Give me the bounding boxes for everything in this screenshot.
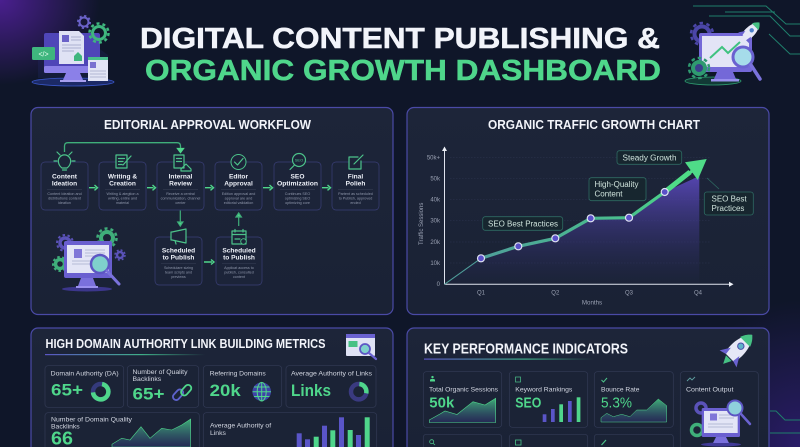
workflow step: internal review: Review (169, 181, 193, 188)
metric card: domain quality backlinks: Backlinks (51, 424, 80, 430)
callout: high-quality content: Content (594, 190, 623, 198)
workflow step: writing and creation: Writing & (108, 174, 137, 181)
kpi card: lower row right (594, 434, 673, 447)
workflow step: seo optimization: optimizing core (285, 201, 310, 205)
metric card: average authority of links: Links (291, 381, 331, 400)
line chart (419, 146, 734, 306)
metric card: average authority bars: Average Authority of (210, 422, 271, 429)
kpi card: keyword rankings (509, 372, 588, 427)
arrow: review down to scheduled (178, 210, 183, 226)
area sparkline (112, 419, 191, 447)
panel: key performance indicators (407, 326, 769, 447)
workflow step: scheduled to publish second: publish, consulted (224, 270, 254, 274)
workflow step: editor approval: Edition approval and (222, 192, 255, 196)
callout: steady growth: Steady Growth (622, 153, 676, 162)
area sparkline (429, 398, 496, 422)
kpi card: total organic sessions (423, 372, 502, 427)
kpi card: total organic sessions: 50k (429, 395, 455, 412)
heading: link building metrics: HIGH DOMAIN AUTHORITY LINK BUILDING METRICS (46, 336, 326, 351)
workflow step: internal review: Internal (169, 174, 193, 181)
workflow step: scheduled to publish second (216, 230, 262, 285)
panel: high domain authority link building metrics (31, 328, 393, 447)
workflow step: final polish: Polieh (346, 181, 365, 188)
panel: editorial approval workflow (31, 108, 393, 314)
workflow step: editor approval: Approval (224, 181, 253, 188)
workflow step: scheduled to publish second: Applicat access to (224, 266, 254, 270)
workflow step: seo optimization (274, 154, 321, 210)
workflow step: final polish: Final (348, 174, 363, 181)
icon: publishing computer illustration: </> (38, 52, 49, 58)
line chart: 30k (430, 219, 441, 225)
workflow step: internal review (157, 155, 204, 210)
metric card: domain authority: Domain Authority (DA) (51, 371, 119, 378)
metric card: quality backlinks: Backlinks (132, 376, 162, 383)
metric card: average authority of links (286, 366, 376, 407)
workflow step: scheduled to publish (155, 229, 202, 285)
line chart: 0 (437, 282, 441, 288)
kpi card: content output: Content Output (686, 386, 734, 393)
workflow step: scheduled to publish: Scheduled (162, 248, 195, 255)
icon: growth monitor and rocket illustration (685, 17, 765, 85)
kpi card: bounce rate (594, 372, 673, 427)
kpi card: lower row middle (509, 434, 588, 447)
area sparkline (601, 399, 667, 422)
workflow step: editor approval: approval are and (225, 196, 252, 200)
workflow step: editor approval: Editor (229, 174, 248, 181)
workflow step: writing and creation (99, 155, 146, 210)
workflow step: editor approval (215, 154, 262, 210)
workflow step: scheduled to publish: to Publish (163, 255, 194, 262)
workflow step: content ideation: Content Ideation and (47, 192, 82, 196)
callout: seo best practices right (704, 178, 753, 215)
metric card: domain quality backlinks (45, 413, 199, 447)
metric card: quality backlinks (127, 366, 199, 407)
metric card: domain authority (45, 366, 124, 407)
icon: rocket (715, 326, 761, 372)
line chart: Q2 (551, 290, 560, 296)
metric card: average authority bars: Links (210, 430, 226, 437)
workflow step: writing and creation: Creation (109, 181, 136, 188)
heading: key performance indicators: KEY PERFORMANCE INDICATORS (424, 340, 628, 358)
connector: ideation to internal review (64, 143, 184, 152)
arrow (204, 260, 214, 264)
workflow step: final polish: to Publish, approved (339, 196, 372, 200)
callout: steady growth (617, 151, 682, 164)
callout: seo best practices: SEO Best Practices (488, 219, 558, 228)
arrow (147, 185, 156, 190)
metric card: referring domains: Referring Domains (210, 371, 266, 378)
workflow step: editor approval: editorial validation (224, 201, 253, 205)
workflow step: final polish (332, 155, 379, 210)
workflow step: scheduled to publish: team scripts and (165, 270, 192, 274)
kpi card: total organic sessions: Total Organic Sessions (429, 386, 499, 393)
kpi card: keyword rankings: SEO (515, 395, 542, 412)
line chart: 40k (430, 198, 441, 204)
workflow step: internal review: Receive a central (166, 192, 195, 196)
arrow: scheduled up to editor approval (236, 213, 241, 226)
workflow step: writing and creation: writing, entire and (108, 196, 137, 200)
arrow (89, 185, 98, 190)
metric card: referring domains: 20k (210, 381, 241, 400)
title: DIGITAL CONTENT PUBLISHING & (140, 23, 660, 55)
metric card: quality backlinks: 65+ (132, 385, 165, 404)
workflow step: final polish: Partent as scheduled (338, 192, 373, 196)
metric card: quality backlinks: Number of Quality (132, 369, 188, 376)
icon: browser with magnifier (346, 334, 376, 359)
kpi card: lower row left (423, 434, 502, 447)
workflow step: writing and creation: material (116, 201, 129, 205)
metric card: average authority bars (203, 413, 377, 447)
icon: monitor with magnifier (692, 400, 750, 446)
workflow step: scheduled to publish second: Scheduled (222, 248, 256, 255)
workflow step: content ideation: Ideation (52, 181, 77, 188)
workflow step: seo optimization: Optimization (277, 181, 318, 188)
line chart: 50k (430, 176, 441, 182)
metric card: average authority of links: Average Authority of Links (291, 371, 373, 378)
line chart: Months (582, 300, 602, 306)
bar chart (543, 397, 580, 422)
workflow step: seo optimization: SEO (291, 174, 304, 181)
callout: seo best practices right: SEO Best (712, 194, 747, 204)
callout: high-quality content (589, 178, 646, 201)
kpi card: content output (680, 372, 758, 447)
kpi card: keyword rankings: Keyword Rankings (515, 386, 573, 393)
line chart: Q1 (477, 290, 486, 296)
workflow step: seo optimization: SEO (295, 158, 303, 163)
workflow step: content ideation: ideation (58, 201, 71, 205)
metric card: domain quality backlinks: Number of Domain Quality (51, 416, 133, 424)
heading: organic traffic growth chart: ORGANIC TRAFFIC GROWTH CHART (488, 117, 700, 132)
line chart: Q3 (625, 290, 634, 296)
heading: editorial approval workflow: EDITORIAL APPROVAL WORKFLOW (104, 117, 312, 132)
workflow step: seo optimization: optimizing SEO (285, 196, 310, 200)
arrow (263, 185, 272, 190)
workflow step: final polish: ended (350, 201, 361, 205)
workflow step: writing and creation: Writing & ategtion a (106, 192, 139, 196)
bar chart (297, 417, 370, 447)
workflow step: seo optimization: Continues SEO (285, 192, 310, 196)
workflow step: scheduled to publish: previews (171, 275, 186, 279)
line chart: 50k+ (427, 155, 440, 161)
workflow step: content ideation: Content (52, 174, 78, 181)
arrow (205, 185, 214, 190)
callout: seo best practices (483, 217, 563, 230)
title (140, 23, 661, 87)
kpi card: bounce rate: 5.3% (601, 395, 632, 412)
line chart: Traffic Sessions (419, 203, 425, 245)
line chart: 10k (430, 261, 441, 267)
workflow step: internal review: communication, channel (161, 196, 201, 200)
workflow step: internal review: center (175, 201, 186, 205)
workflow step: scheduled to publish: Schedulare sizing (164, 266, 193, 270)
icon: monitor with magnifier illustration (53, 228, 125, 292)
line chart: 20k (430, 240, 441, 246)
kpi card: bounce rate: Bounce Rate (601, 386, 640, 393)
icon: publishing computer illustration (32, 16, 114, 86)
workflow step: content ideation (41, 152, 88, 210)
callout: seo best practices right: Practices (712, 204, 744, 213)
workflow step: scheduled to publish second: content (233, 275, 245, 279)
arrow (322, 185, 330, 190)
metric card: domain authority: 65+ (51, 381, 83, 400)
panel: organic traffic growth chart (407, 108, 769, 314)
title: ORGANIC GROWTH DASHBOARD (145, 55, 661, 87)
callout: high-quality content: High-Quality (594, 180, 639, 189)
workflow step: scheduled to publish second: to Publish (223, 255, 255, 262)
metric card: referring domains (203, 366, 282, 407)
workflow step: content ideation: distributions content (48, 196, 81, 200)
line chart: Q4 (694, 290, 703, 296)
